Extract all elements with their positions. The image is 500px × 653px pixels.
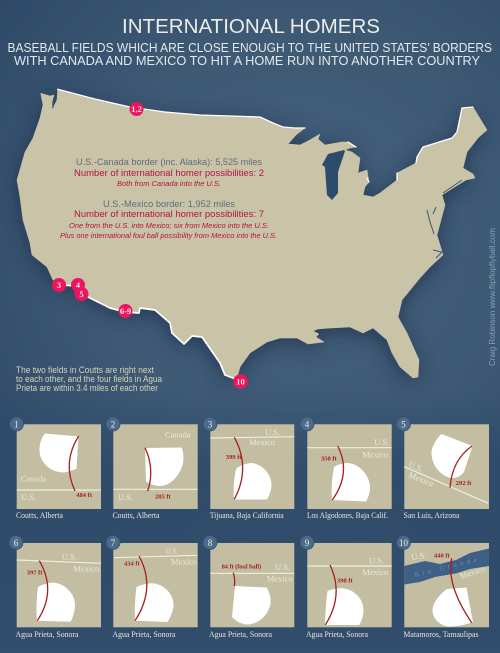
panel: field 5: Mexico bbox=[407, 470, 435, 489]
text block: border statistics: One from the U.S. into Mexico; six from Mexico into the U.S. bbox=[69, 221, 269, 230]
panel: field 8: U.S. bbox=[275, 562, 290, 572]
panel: field 8: 84 ft (foul ball) bbox=[222, 563, 261, 570]
panel: field 9: U.S. bbox=[369, 555, 384, 565]
panel: field 6: Agua Prieta, Sonora bbox=[16, 629, 79, 639]
panel: field 7: U.S. bbox=[166, 547, 178, 555]
note about Coutts and Agua Prieta: The two fields in Coutts are right next bbox=[16, 365, 154, 375]
border with Canada bbox=[58, 89, 473, 182]
panel: field 1: Canada bbox=[21, 474, 46, 484]
panel: field 1: U.S. bbox=[21, 492, 36, 502]
panel: field 3: Mexico bbox=[249, 437, 275, 447]
panel: field 1 bbox=[10, 417, 101, 520]
text block: border statistics: Plus one international foul ball possibility from Mexico into the U.S. bbox=[60, 231, 277, 240]
panel: field 2: Coutts, Alberta bbox=[112, 510, 160, 520]
panel: field 3: 399 ft bbox=[226, 454, 242, 461]
panel: field 10: 440 ft bbox=[434, 552, 451, 559]
panel: field 9 bbox=[300, 536, 392, 639]
panel: field 6: U.S. bbox=[62, 551, 77, 561]
panel: field 9: 9 bbox=[305, 538, 310, 548]
panel: field 2: U.S. bbox=[118, 492, 133, 502]
panel: field 4: Mexico bbox=[362, 450, 388, 460]
subtitle: BASEBALL FIELDS WHICH ARE CLOSE ENOUGH TO THE UNITED STATES’ BORDERS bbox=[8, 41, 492, 55]
panel: field 10: Rio Grande bbox=[414, 556, 478, 579]
map marker: field 4 bbox=[71, 278, 85, 292]
panel: field 3 bbox=[203, 417, 294, 520]
credit: Craig Robinson www.flipflopflyball.com bbox=[488, 228, 497, 366]
panel: field 1: 1 bbox=[14, 419, 19, 429]
panel: field 2: Canada bbox=[165, 430, 191, 440]
text block: border statistics: Number of international homer possibilities: 2 bbox=[74, 168, 264, 179]
panel: field 2 bbox=[106, 417, 198, 520]
panel: field 1: Coutts, Alberta bbox=[16, 510, 63, 520]
panel: field 4: 350 ft bbox=[321, 456, 338, 463]
text block: border statistics: U.S.-Mexico border: 1,952 miles bbox=[103, 199, 235, 210]
map marker: field 10: 10 bbox=[236, 376, 245, 386]
panel: field 7 bbox=[106, 536, 198, 639]
panel: field 1: 484 ft bbox=[76, 492, 93, 499]
panel: field 9: Mexico bbox=[362, 567, 388, 577]
panel: field 4: Los Algodones, Baja Calif. bbox=[307, 510, 388, 520]
map marker: fields 6 to 9 bbox=[118, 304, 132, 318]
map marker: field 10 bbox=[233, 374, 248, 389]
map marker: field 5: 5 bbox=[79, 289, 84, 299]
panel: field 8 bbox=[203, 536, 294, 639]
text block: border statistics bbox=[60, 157, 277, 240]
panel: field 4: 4 bbox=[305, 419, 310, 429]
panel: field 8: Agua Prieta, Sonora bbox=[209, 629, 272, 639]
panel: field 5: San Luis, Arizona bbox=[404, 510, 460, 520]
panel: field 7: Mexico bbox=[171, 556, 197, 566]
panel: field 9: Agua Prieta, Sonora bbox=[306, 629, 368, 639]
panel: field 8: Mexico bbox=[267, 574, 293, 584]
panel: field 9: 390 ft bbox=[337, 577, 354, 584]
panel: field 5 bbox=[396, 417, 489, 520]
note about Coutts and Agua Prieta: to each other, and the four fields in Agua bbox=[16, 374, 162, 384]
panel: field 6: 6 bbox=[14, 538, 19, 548]
panel: field 6 bbox=[9, 536, 101, 639]
panel: field 10: Matamoros, Tamaulipas bbox=[404, 629, 478, 639]
panel: field 5: 292 ft bbox=[456, 480, 472, 487]
coastal inlets bbox=[53, 97, 462, 258]
panel: field 6: 397 ft bbox=[27, 569, 43, 576]
panel: field 8: 8 bbox=[208, 538, 213, 548]
panel: field 7: Agua Prieta, Sonora bbox=[112, 629, 176, 639]
map marker: field 3 bbox=[52, 278, 66, 292]
panel: field 10 bbox=[396, 536, 489, 639]
panel: field 7: 7 bbox=[111, 538, 116, 548]
panel: field 3: U.S. bbox=[265, 427, 280, 437]
map marker: fields 1 and 2 bbox=[130, 102, 144, 116]
panel: field 3: Tijuana, Baja California bbox=[210, 510, 284, 520]
panel: field 4 bbox=[300, 417, 392, 520]
panel: field 2: 2 bbox=[111, 419, 115, 429]
panel: field 7: 434 ft bbox=[124, 560, 141, 567]
map marker: fields 1 and 2: 1,2 bbox=[131, 104, 142, 114]
Lake Michigan bbox=[322, 150, 345, 200]
note about Coutts and Agua Prieta bbox=[16, 365, 162, 393]
panel: field 2: 285 ft bbox=[155, 494, 172, 501]
border with Mexico bbox=[60, 285, 238, 380]
text block: border statistics: Both from Canada into the U.S. bbox=[117, 179, 221, 188]
panel: field 5: U.S. bbox=[407, 459, 425, 474]
panel: field 10: Mexico bbox=[459, 563, 486, 581]
map marker: fields 6 to 9: 6-9 bbox=[120, 306, 131, 316]
text block: border statistics: Number of international homer possibilities: 7 bbox=[74, 209, 264, 220]
panel: field 10: U.S. bbox=[411, 550, 427, 562]
subtitle: WITH CANADA AND MEXICO TO HIT A HOME RUN INTO ANOTHER COUNTRY bbox=[14, 54, 481, 68]
panel: field 6: Mexico bbox=[73, 564, 99, 574]
panel: field 10: 10 bbox=[399, 538, 408, 548]
note about Coutts and Agua Prieta: Prieta are within 3.4 miles of each other bbox=[16, 383, 158, 393]
panel: field 4: U.S. bbox=[374, 437, 389, 447]
panel: field 5: 5 bbox=[401, 419, 406, 429]
map marker: field 5 bbox=[74, 287, 88, 301]
map marker: field 4: 4 bbox=[76, 280, 81, 290]
panel: field 3: 3 bbox=[208, 419, 213, 429]
subtitle bbox=[8, 41, 492, 68]
map marker: field 3: 3 bbox=[57, 280, 61, 290]
title: INTERNATIONAL HOMERS bbox=[122, 16, 380, 38]
text block: border statistics: U.S.-Canada border (inc. Alaska): 5,525 miles bbox=[76, 157, 262, 168]
map of the United States bbox=[17, 89, 487, 380]
